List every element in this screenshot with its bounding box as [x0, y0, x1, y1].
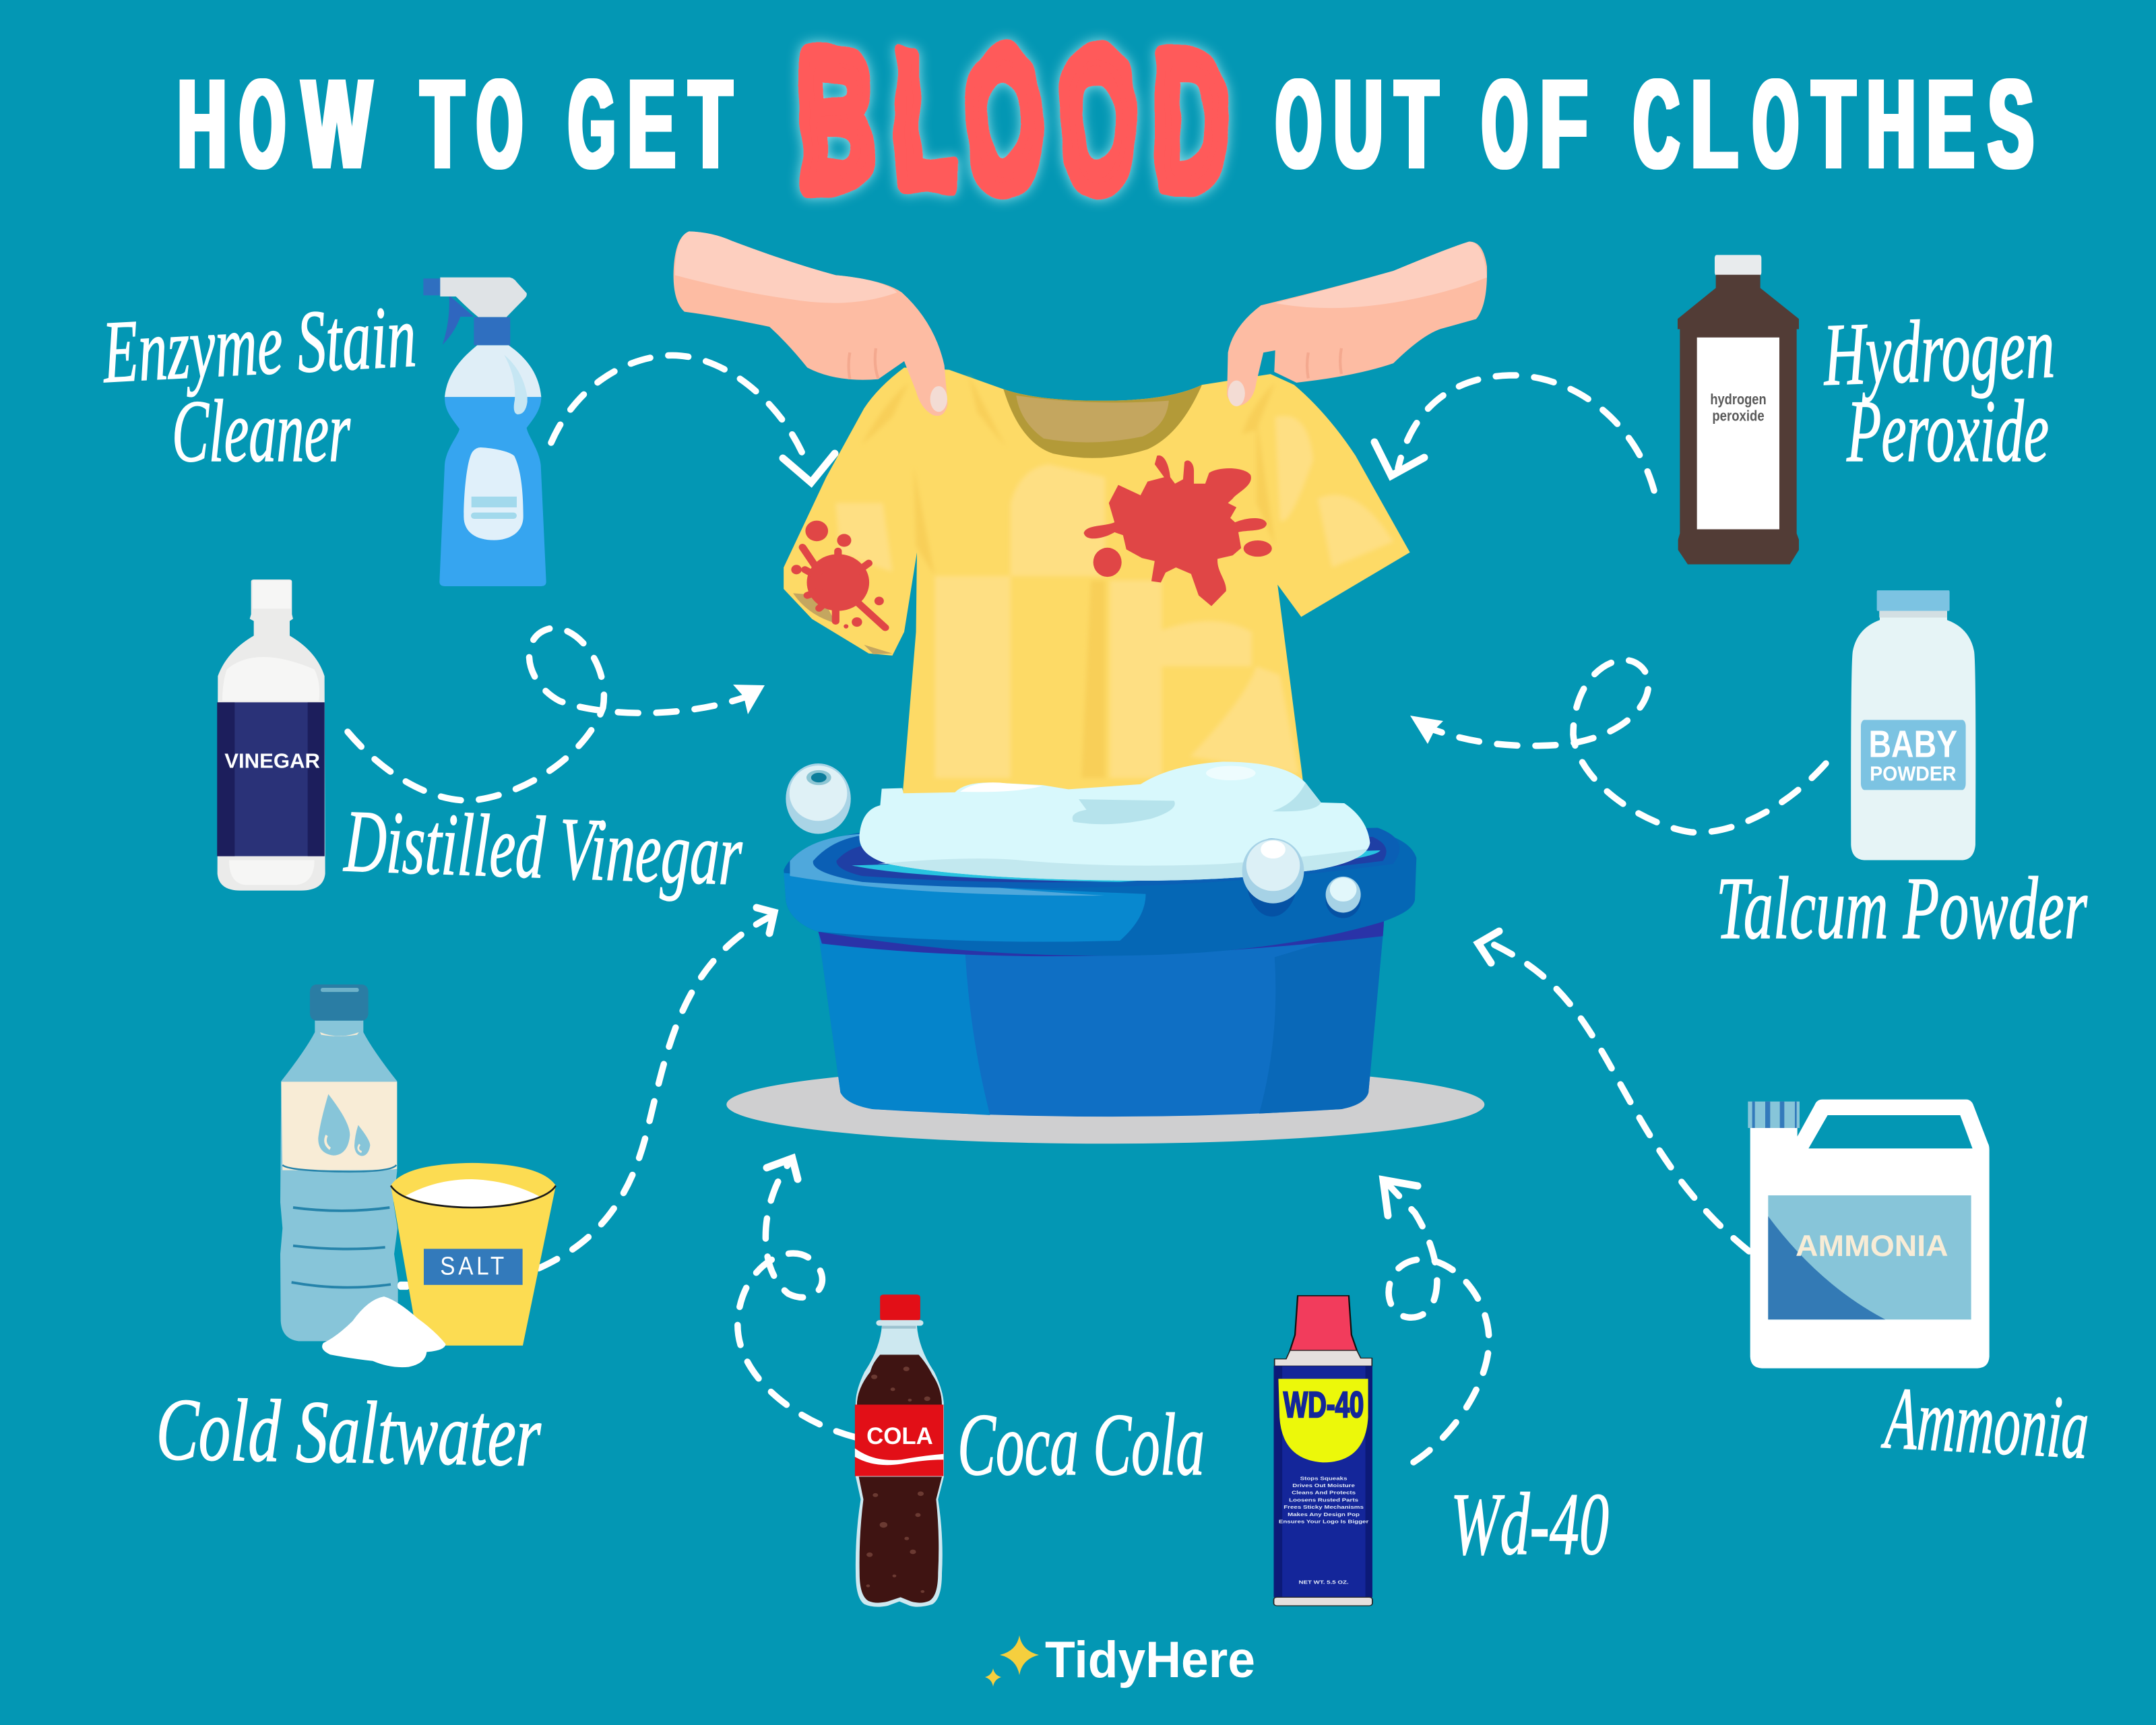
icon: hydrogen peroxide bottle: hydrogen [1710, 391, 1767, 408]
title: F [1540, 55, 1587, 194]
title: T [421, 55, 464, 194]
icon: wd-40 can: Cleans And Protects [1292, 1490, 1356, 1495]
title: O [1058, 11, 1138, 229]
title: G [569, 55, 615, 194]
title: O [477, 55, 522, 194]
illustration: left hand [674, 231, 948, 416]
title: T [689, 55, 732, 194]
arrow: wd-40 to basin [1383, 1180, 1489, 1462]
illustration: right hand [1227, 242, 1487, 406]
title: O [964, 11, 1044, 229]
label: hydrogen peroxide: Peroxide [1846, 381, 2049, 480]
title: E [628, 55, 675, 194]
title: C [1634, 55, 1679, 194]
icon: ammonia jug [1748, 1100, 1990, 1369]
icon: cola bottle: COLA [866, 1422, 933, 1449]
icon: enzyme spray bottle [423, 278, 546, 586]
icon: vinegar bottle [217, 579, 325, 891]
title: B [798, 11, 875, 229]
label: hydrogen peroxide [1821, 297, 2056, 480]
icon: salt cup [322, 1163, 556, 1367]
icon: vinegar bottle: VINEGAR [224, 749, 320, 772]
title: U [1334, 55, 1383, 194]
arrow: vinegar to shirt [348, 628, 765, 801]
logo: tidyhere: TidyHere [1045, 1631, 1255, 1689]
title: L [893, 11, 957, 229]
icon: wd-40 can [1274, 1296, 1372, 1606]
icon: baby powder bottle: BABY [1868, 722, 1957, 765]
title: S [1988, 55, 2033, 194]
title: O [1753, 55, 1798, 194]
illustration: wash basin [726, 761, 1484, 1143]
icon: baby powder bottle: POWDER [1870, 763, 1957, 786]
title: T [1812, 55, 1855, 194]
label: enzyme stain cleaner [100, 286, 418, 480]
title [178, 11, 2033, 229]
illustration: blood stain on chest [1084, 456, 1272, 606]
icon: cola bottle [855, 1294, 944, 1607]
title: L [1691, 55, 1738, 194]
icon: hydrogen peroxide bottle: peroxide [1712, 408, 1765, 424]
label: enzyme stain cleaner: Cleaner [172, 381, 350, 480]
arrow: ammonia to basin [1478, 931, 1749, 1251]
illustration: yellow shirt [784, 368, 1410, 804]
illustration: blood stain on sleeve [791, 521, 885, 629]
icon: wd-40 can: Loosens Rusted Parts [1289, 1497, 1358, 1503]
icon: wd-40 can: Ensures Your Logo Is Bigger [1279, 1519, 1369, 1524]
arrow: talcum powder to shirt [1410, 660, 1826, 832]
icon: wd-40 can: NET WT. 5.5 OZ. [1298, 1579, 1349, 1585]
icon: hydrogen peroxide bottle [1678, 255, 1799, 565]
label: enzyme stain cleaner: Enzyme Stain [100, 286, 418, 402]
icon: wd-40 can: Stops Squeaks [1300, 1476, 1348, 1481]
label: distilled vinegar: Distilled Vinegar [342, 791, 744, 904]
icon: baby powder bottle [1851, 590, 1975, 860]
arrow: hydrogen peroxide to shirt [1374, 375, 1654, 491]
foam [859, 761, 1370, 881]
label: coca cola: Coca Cola [957, 1395, 1205, 1494]
title: O [1276, 55, 1321, 194]
icon: wd-40 can: Frees Sticky Mechanisms [1283, 1504, 1364, 1510]
title: H [1867, 55, 1915, 194]
arrow: coca cola to basin [738, 1158, 856, 1437]
title: D [1153, 11, 1230, 229]
title: H [178, 55, 226, 194]
arrow: saltwater to basin [539, 908, 774, 1268]
icon: salt cup: SALT [440, 1251, 504, 1280]
icon: wd-40 can: Makes Any Design Pop [1288, 1511, 1360, 1517]
icon: wd-40 can: Drives Out Moisture [1292, 1482, 1355, 1488]
title: E [1927, 55, 1974, 194]
label: cold saltwater: Cold Saltwater [155, 1379, 542, 1485]
title: W [303, 55, 371, 194]
title: O [240, 55, 285, 194]
title: T [1395, 55, 1438, 194]
icon: wd-40 can: WD-40 [1283, 1385, 1364, 1425]
illustration: bubbles [786, 763, 1361, 918]
icon: cold water bottle [280, 984, 398, 1341]
icon: ammonia jug: AMMONIA [1796, 1230, 1948, 1263]
label: wd-40: Wd-40 [1451, 1474, 1609, 1573]
title: O [1482, 55, 1527, 194]
arrow: enzyme cleaner to shirt [551, 355, 835, 482]
